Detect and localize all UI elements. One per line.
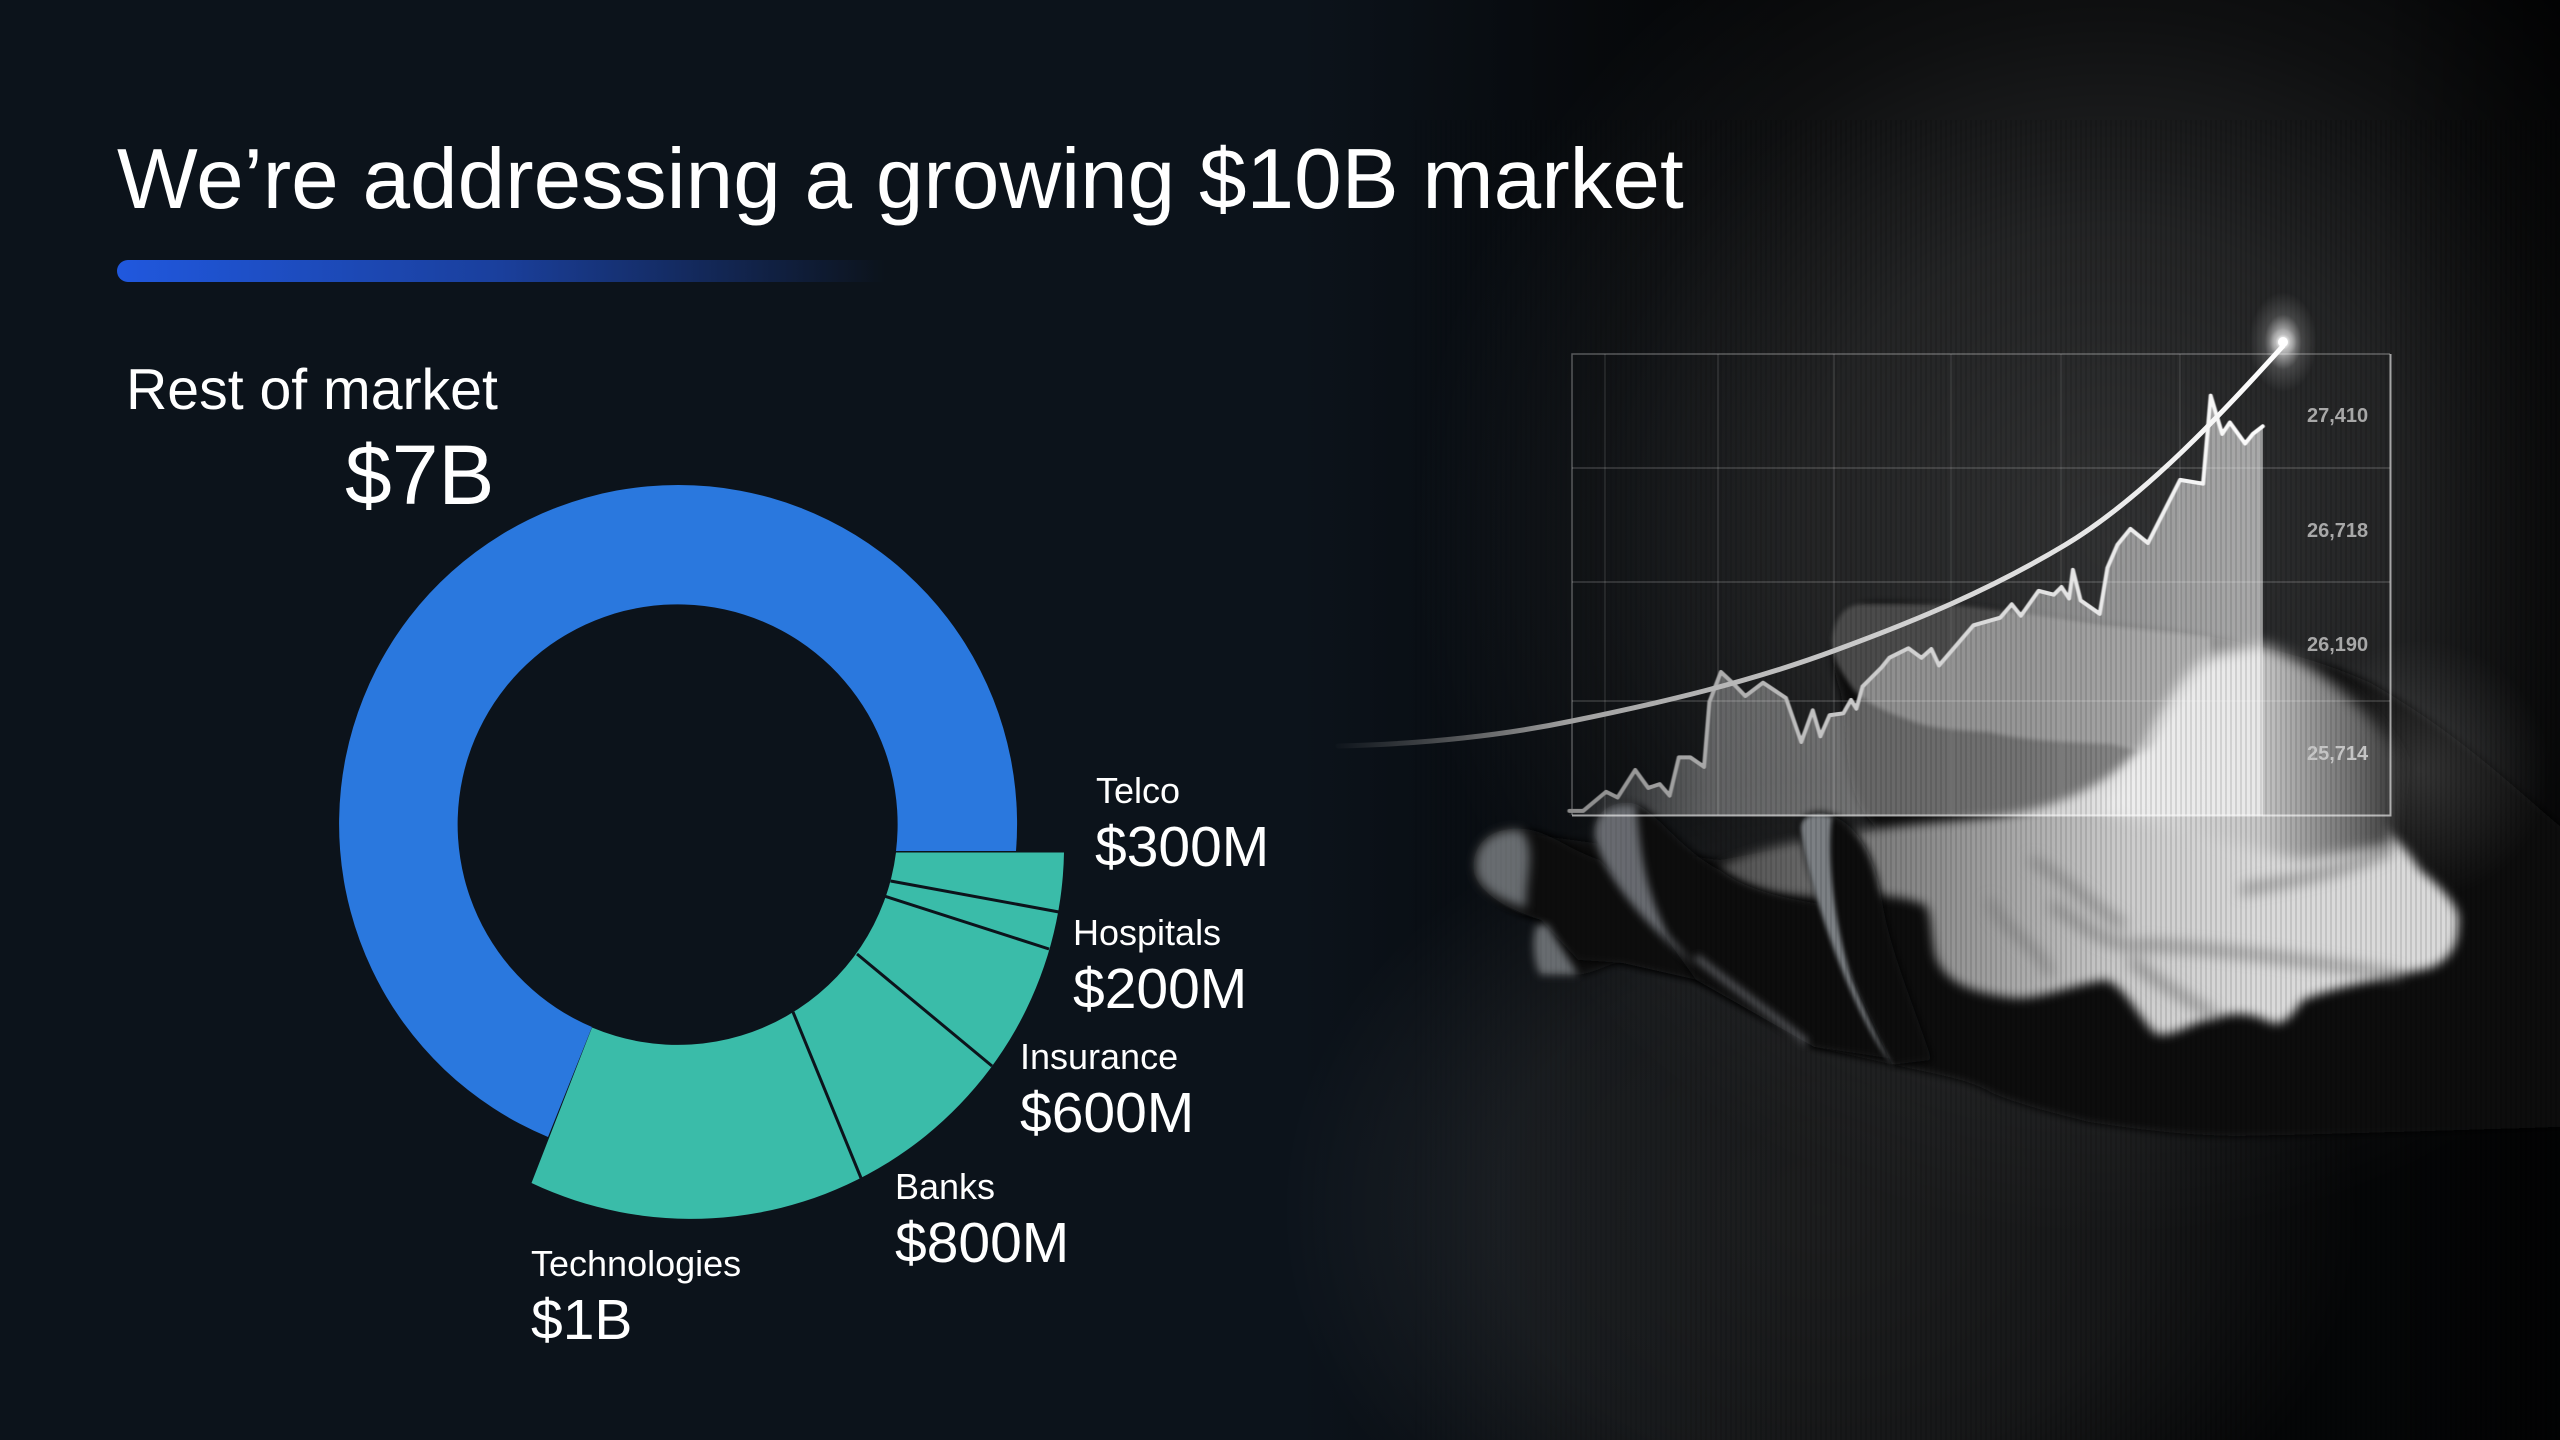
exponential growth curve xyxy=(1338,346,2283,746)
chart axis labels xyxy=(2307,405,2369,765)
palm xyxy=(1718,750,2459,1034)
chart axis labels: 26,718 xyxy=(2307,520,2368,542)
palm creases xyxy=(1990,850,2400,1015)
label: rest of market: Rest of market xyxy=(126,358,498,422)
hand silhouette xyxy=(1474,603,2560,1136)
label: banks: $800M xyxy=(895,1211,1069,1275)
label: insurance: $600M xyxy=(1020,1081,1194,1145)
finger 2 xyxy=(1594,803,1900,1060)
title underline bar xyxy=(117,260,885,282)
glowing point xyxy=(2249,292,2317,392)
label: rest of market xyxy=(126,358,498,522)
wrist sheen xyxy=(2290,640,2560,900)
label: technologies: $1B xyxy=(531,1288,632,1352)
chart data line xyxy=(1569,396,2263,811)
segment: teal segments xyxy=(532,852,1064,1219)
label: telco: Telco xyxy=(1096,770,1180,811)
label: insurance: Insurance xyxy=(1020,1036,1178,1077)
scanline texture xyxy=(1712,408,2460,1036)
label: hospitals: Hospitals xyxy=(1073,912,1221,953)
chart axis labels: 26,190 xyxy=(2307,634,2368,656)
label: insurance xyxy=(1020,1036,1194,1145)
label: banks xyxy=(895,1166,1069,1275)
chart frame and grid xyxy=(1572,354,2390,816)
label: telco xyxy=(1095,770,1269,879)
finger 3 xyxy=(1800,813,1932,1068)
segment: rest of market xyxy=(339,485,1017,1137)
finger 1 xyxy=(1473,828,1720,985)
label: rest of market: $7B xyxy=(345,428,494,522)
donut chart xyxy=(339,485,1064,1219)
chart axis labels: 25,714 xyxy=(2307,743,2369,765)
title: We’re addressing a growing $10B market xyxy=(117,132,1684,227)
label: banks: Banks xyxy=(895,1166,995,1207)
thumb xyxy=(1832,604,2211,752)
chart axis labels: 27,410 xyxy=(2307,405,2368,427)
bright base of thumb xyxy=(2100,644,2400,860)
label: hospitals xyxy=(1073,912,1247,1021)
label: technologies: Technologies xyxy=(531,1243,741,1284)
photo: hand holding a rising chart xyxy=(1260,0,2560,1440)
label: telco: $300M xyxy=(1095,815,1269,879)
label: technologies xyxy=(531,1243,741,1352)
segment separators xyxy=(793,881,1059,1178)
label: hospitals: $200M xyxy=(1073,957,1247,1021)
chart fill xyxy=(1569,396,2263,815)
